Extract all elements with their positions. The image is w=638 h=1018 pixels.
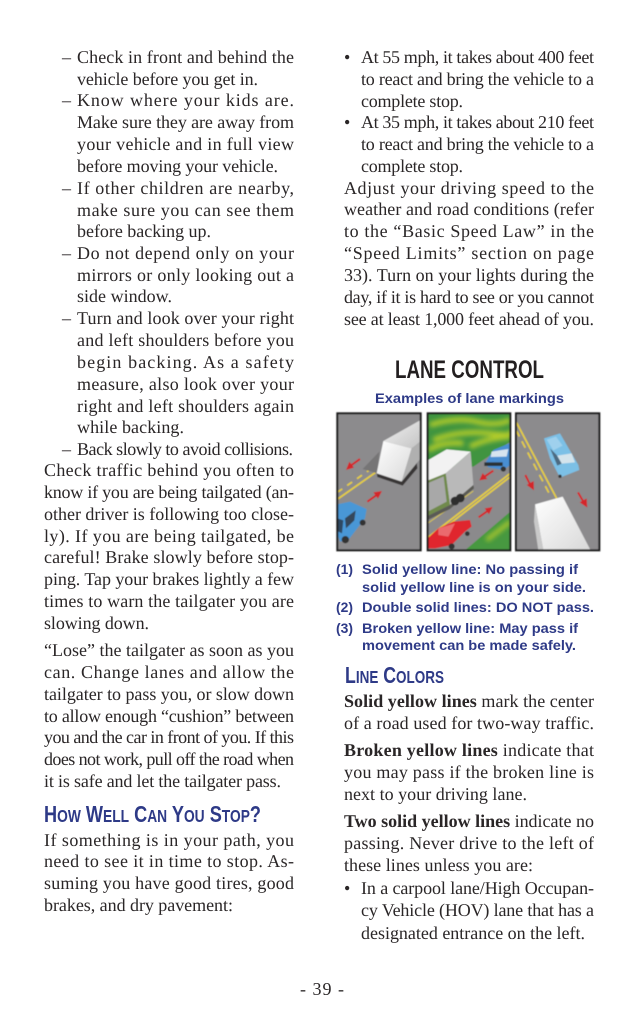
text block: stopping intro: suming you have good tires, good (44, 873, 294, 893)
text block: backing up checklist: – (61, 47, 72, 67)
text block: line colors explanation: of a road used for two-way traffic. (344, 713, 594, 733)
text block: tailgating advice: times to warn the tailgater you are (44, 591, 294, 611)
text block: tailgating advice: ping. Tap your brakes lightly a few (44, 569, 294, 589)
text block: backing up checklist: vehicle before you get in. (77, 69, 258, 89)
text block: line colors explanation: cy Vehicle (HOV) lane that has a (361, 900, 594, 920)
legend: lane marking key: Double solid lines: DO NOT pass. (362, 599, 594, 615)
page number: - 39 - (300, 979, 344, 999)
text block: stopping distances: At 55 mph, it takes about 400 feet (361, 47, 594, 67)
heading: lane control: LANE CONTROL (395, 356, 544, 384)
text block: stopping distances: day, if it is hard to see or you cannot (344, 287, 594, 307)
text block: backing up checklist: before backing up. (77, 221, 211, 241)
text block: tailgating advice: Check traffic behind you often to (44, 460, 294, 480)
text block: backing up checklist: If other children are nearby, (77, 178, 294, 198)
text block: stopping distances (344, 47, 594, 329)
text block: tailgating advice (44, 460, 294, 791)
text block: tailgating advice: “Lose” the tailgater as soon as you (44, 640, 294, 660)
text block: line colors explanation: In a carpool lane/High Occupan- (361, 878, 594, 898)
text block: stopping intro (44, 830, 294, 915)
text block: tailgating advice: it is safe and let the tailgater pass. (44, 771, 281, 791)
text block: tailgating advice: does not work, pull off the road when (44, 749, 294, 769)
text block: line colors explanation: next to your driving lane. (344, 784, 527, 804)
text block: backing up checklist: mirrors or only looking out a (77, 265, 294, 285)
text block: stopping distances: weather and road conditions (refer (344, 199, 594, 219)
text block: backing up checklist: side window. (77, 286, 172, 306)
text block: stopping intro: need to see it in time to stop. As- (44, 851, 294, 871)
legend: lane marking key: (1) (336, 561, 353, 577)
text block: backing up checklist: – (61, 243, 72, 263)
text block: tailgating advice: other driver is following too close- (44, 504, 294, 524)
panel 3: broken yellow line (516, 413, 599, 550)
heading: line colors: LINE COLORS (345, 662, 444, 688)
text block: backing up checklist: your vehicle and in full view (77, 134, 294, 154)
subheading: examples of lane markings: Examples of lane markings (375, 390, 564, 406)
text block: line colors explanation: Broken yellow lines indicate that (344, 740, 594, 760)
text block: line colors explanation: passing. Never drive to the left of (344, 833, 594, 853)
text block: line colors explanation: you may pass if the broken line is (344, 762, 594, 782)
text block: backing up checklist: measure, also look over your (77, 374, 294, 394)
text block: tailgating advice: tailgater to pass you, or slow down (44, 684, 294, 704)
text block: stopping distances: “Speed Limits” section on page (344, 243, 594, 263)
text block: backing up checklist: begin backing. As a safety (77, 352, 294, 372)
text block: line colors explanation (344, 691, 594, 943)
text block: line colors explanation: Two solid yellow lines indicate no (344, 811, 594, 831)
text block: backing up checklist: – (61, 178, 72, 198)
text block: backing up checklist: right and left shoulders again (77, 396, 294, 416)
heading: how well can you stop: HOW WELL CAN YOU STOP? (44, 801, 261, 827)
legend: lane marking key (336, 561, 594, 653)
text block: stopping distances: • (344, 47, 350, 67)
legend: lane marking key: Broken yellow line: May pass if (362, 620, 578, 636)
text block: backing up checklist: Back slowly to avoid collisions. (77, 439, 293, 459)
text block: line colors explanation: these lines unless you are: (344, 855, 533, 875)
text block: stopping distances: to react and bring the vehicle to a (361, 134, 594, 154)
legend: lane marking key: (2) (336, 599, 353, 615)
text block: backing up checklist: – (61, 90, 72, 110)
text block: stopping distances: • (344, 112, 350, 132)
legend: lane marking key: (3) (336, 620, 353, 636)
text block: stopping distances: see at least 1,000 feet ahead of you. (344, 309, 594, 329)
text block: tailgating advice: careful! Brake slowly before stop- (44, 547, 294, 567)
text block: line colors explanation: • (344, 878, 350, 898)
text block: backing up checklist: Check in front and behind the (77, 47, 294, 67)
legend: lane marking key: movement can be made safely. (362, 637, 576, 653)
text block: backing up checklist: Turn and look over your right (77, 308, 294, 328)
text block: stopping intro: brakes, and dry pavement: (44, 895, 233, 915)
text block: backing up checklist (61, 47, 294, 459)
text block: backing up checklist: Do not depend only on your (77, 243, 294, 263)
text block: stopping distances: At 35 mph, it takes about 210 feet (361, 112, 594, 132)
text block: stopping distances: to react and bring the vehicle to a (361, 69, 594, 89)
text block: backing up checklist: and left shoulders before you (77, 330, 294, 350)
panel 1: solid yellow line (337, 413, 421, 550)
panel 2: double solid lines (428, 413, 513, 550)
legend: lane marking key: Solid yellow line: No passing if (362, 561, 578, 577)
text block: tailgating advice: slowing down. (44, 613, 149, 633)
text block: tailgating advice: ly). If you are being tailgated, be (44, 526, 294, 546)
illustration: lane marking panels (337, 413, 599, 550)
text block: stopping intro: If something is in your path, you (44, 830, 294, 850)
text block: backing up checklist: make sure you can see them (77, 200, 294, 220)
text block: tailgating advice: you and the car in front of you. If this (44, 727, 294, 747)
text block: backing up checklist: before moving your vehicle. (77, 156, 278, 176)
text block: line colors explanation: designated entrance on the left. (361, 923, 585, 943)
text block: line colors explanation: Solid yellow lines mark the center (344, 691, 594, 711)
text block: tailgating advice: know if you are being tailgated (an- (44, 482, 294, 502)
text block: backing up checklist: Make sure they are away from (77, 112, 294, 132)
legend: lane marking key: solid yellow line is on your side. (362, 579, 586, 595)
text block: tailgating advice: can. Change lanes and allow the (44, 662, 294, 682)
text block: backing up checklist: Know where your kids are. (77, 90, 294, 110)
text block: backing up checklist: – (61, 439, 72, 459)
text block: stopping distances: Adjust your driving speed to the (344, 178, 594, 198)
text block: stopping distances: complete stop. (361, 156, 463, 176)
text block: stopping distances: to the “Basic Speed Law” in the (344, 221, 594, 241)
text block: stopping distances: 33). Turn on your lights during the (344, 265, 594, 285)
text block: stopping distances: complete stop. (361, 91, 463, 111)
text block: backing up checklist: – (61, 308, 72, 328)
text block: backing up checklist: while backing. (77, 417, 184, 437)
text block: tailgating advice: to allow enough “cushion” between (44, 706, 294, 726)
